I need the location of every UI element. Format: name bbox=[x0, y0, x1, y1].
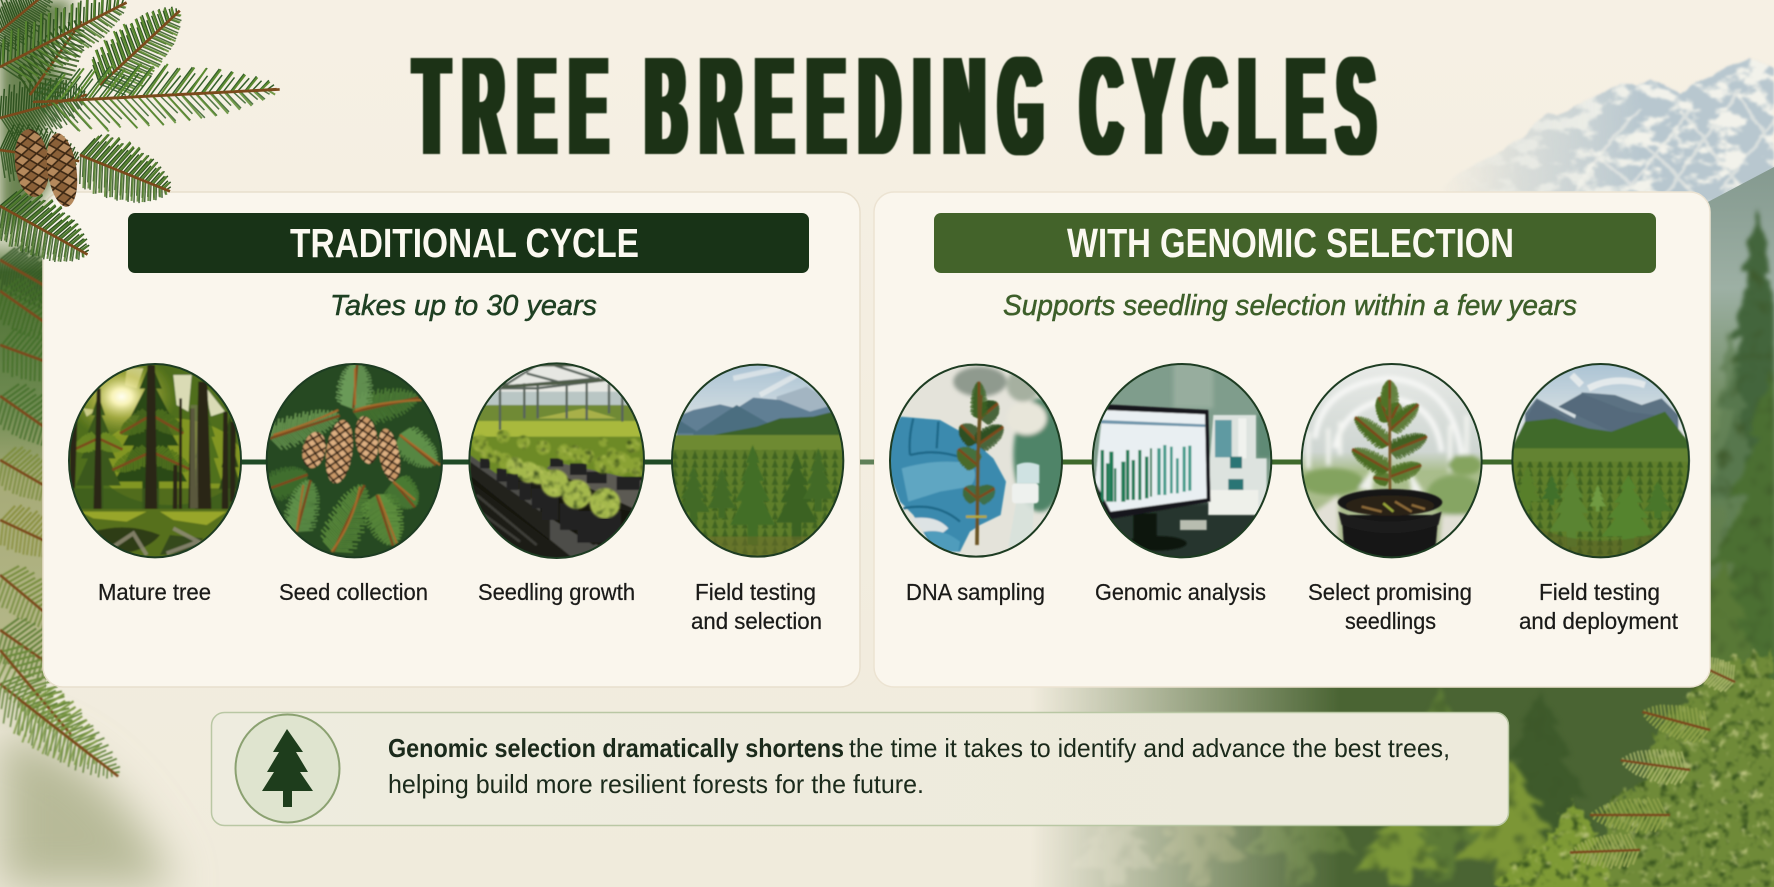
label: Field testing bbox=[695, 579, 816, 605]
decoration: pine branch with cones bbox=[0, 0, 281, 282]
photo: cones on branch bbox=[263, 360, 447, 562]
connectors: genomic selection bbox=[1061, 460, 1513, 464]
step: DNA sampling bbox=[887, 362, 1067, 605]
header: traditional cycle: TRADITIONAL CYCLE bbox=[290, 220, 639, 266]
label line 2: and deployment bbox=[1519, 608, 1679, 634]
label: Genomic analysis bbox=[1095, 579, 1266, 605]
callout text: helping build more resilient forests for the future. bbox=[388, 769, 924, 799]
step: seedling growth bbox=[467, 362, 647, 605]
step: genomic analysis bbox=[1090, 362, 1277, 605]
icon: pine cones bbox=[12, 127, 82, 209]
background: left mist bbox=[0, 232, 175, 887]
label line 2: seedlings bbox=[1345, 608, 1436, 634]
label: Mature tree bbox=[98, 579, 211, 605]
step: mature tree bbox=[67, 353, 247, 605]
photo: young trees in field bbox=[667, 362, 850, 562]
connectors: traditional cycle bbox=[240, 460, 674, 464]
step: field testing and deployment bbox=[1508, 362, 1695, 634]
step: field testing and selection bbox=[667, 362, 850, 634]
photo: field of young firs bbox=[1508, 362, 1695, 562]
subtitle: takes up to 30 years: Takes up to 30 years bbox=[330, 290, 597, 322]
header: with genomic selection: WITH GENOMIC SELECTION bbox=[1067, 220, 1514, 266]
title: TREE BREEDING CYCLES bbox=[414, 28, 1388, 184]
label: Field testing bbox=[1539, 579, 1660, 605]
label: Select promising bbox=[1308, 579, 1472, 605]
background: foreground fir bottom right bbox=[1490, 646, 1774, 887]
panel: traditional cycle bbox=[43, 192, 860, 687]
background: bottom right forest bbox=[1044, 683, 1704, 887]
callout text: the time it takes to identify and advance the best trees, bbox=[849, 733, 1450, 763]
label: Seed collection bbox=[279, 579, 428, 605]
panel: with genomic selection bbox=[874, 192, 1710, 687]
background: blurred fir branches on the left bbox=[0, 237, 136, 799]
background: right side forest strip bbox=[1675, 167, 1774, 730]
callout text: Genomic selection dramatically shortens bbox=[388, 733, 844, 763]
photo: nursery greenhouse bbox=[467, 362, 647, 562]
label: Seedling growth bbox=[478, 579, 635, 605]
icon: tree in circle bbox=[236, 714, 340, 822]
photo: gloved hand with sprig and vial bbox=[887, 362, 1067, 562]
callout text bbox=[388, 733, 1450, 799]
callout: key takeaway bbox=[212, 712, 1508, 826]
label: DNA sampling bbox=[906, 579, 1045, 605]
header: traditional cycle bbox=[128, 213, 809, 273]
header: with genomic selection bbox=[934, 213, 1656, 273]
photo: monitor with genomic data bbox=[1090, 362, 1277, 562]
background: snowy mountains bbox=[1440, 58, 1774, 205]
photo: potted seedling bbox=[1298, 362, 1485, 562]
photo: sunlit forest bbox=[67, 353, 247, 562]
subtitle: seedling selection within a few years: Supports seedling selection within a few years bbox=[1003, 290, 1577, 322]
step: select promising seedlings bbox=[1298, 362, 1485, 634]
connector: between panels bbox=[860, 460, 874, 464]
step: seed collection bbox=[263, 360, 447, 605]
label line 2: and selection bbox=[691, 608, 822, 634]
